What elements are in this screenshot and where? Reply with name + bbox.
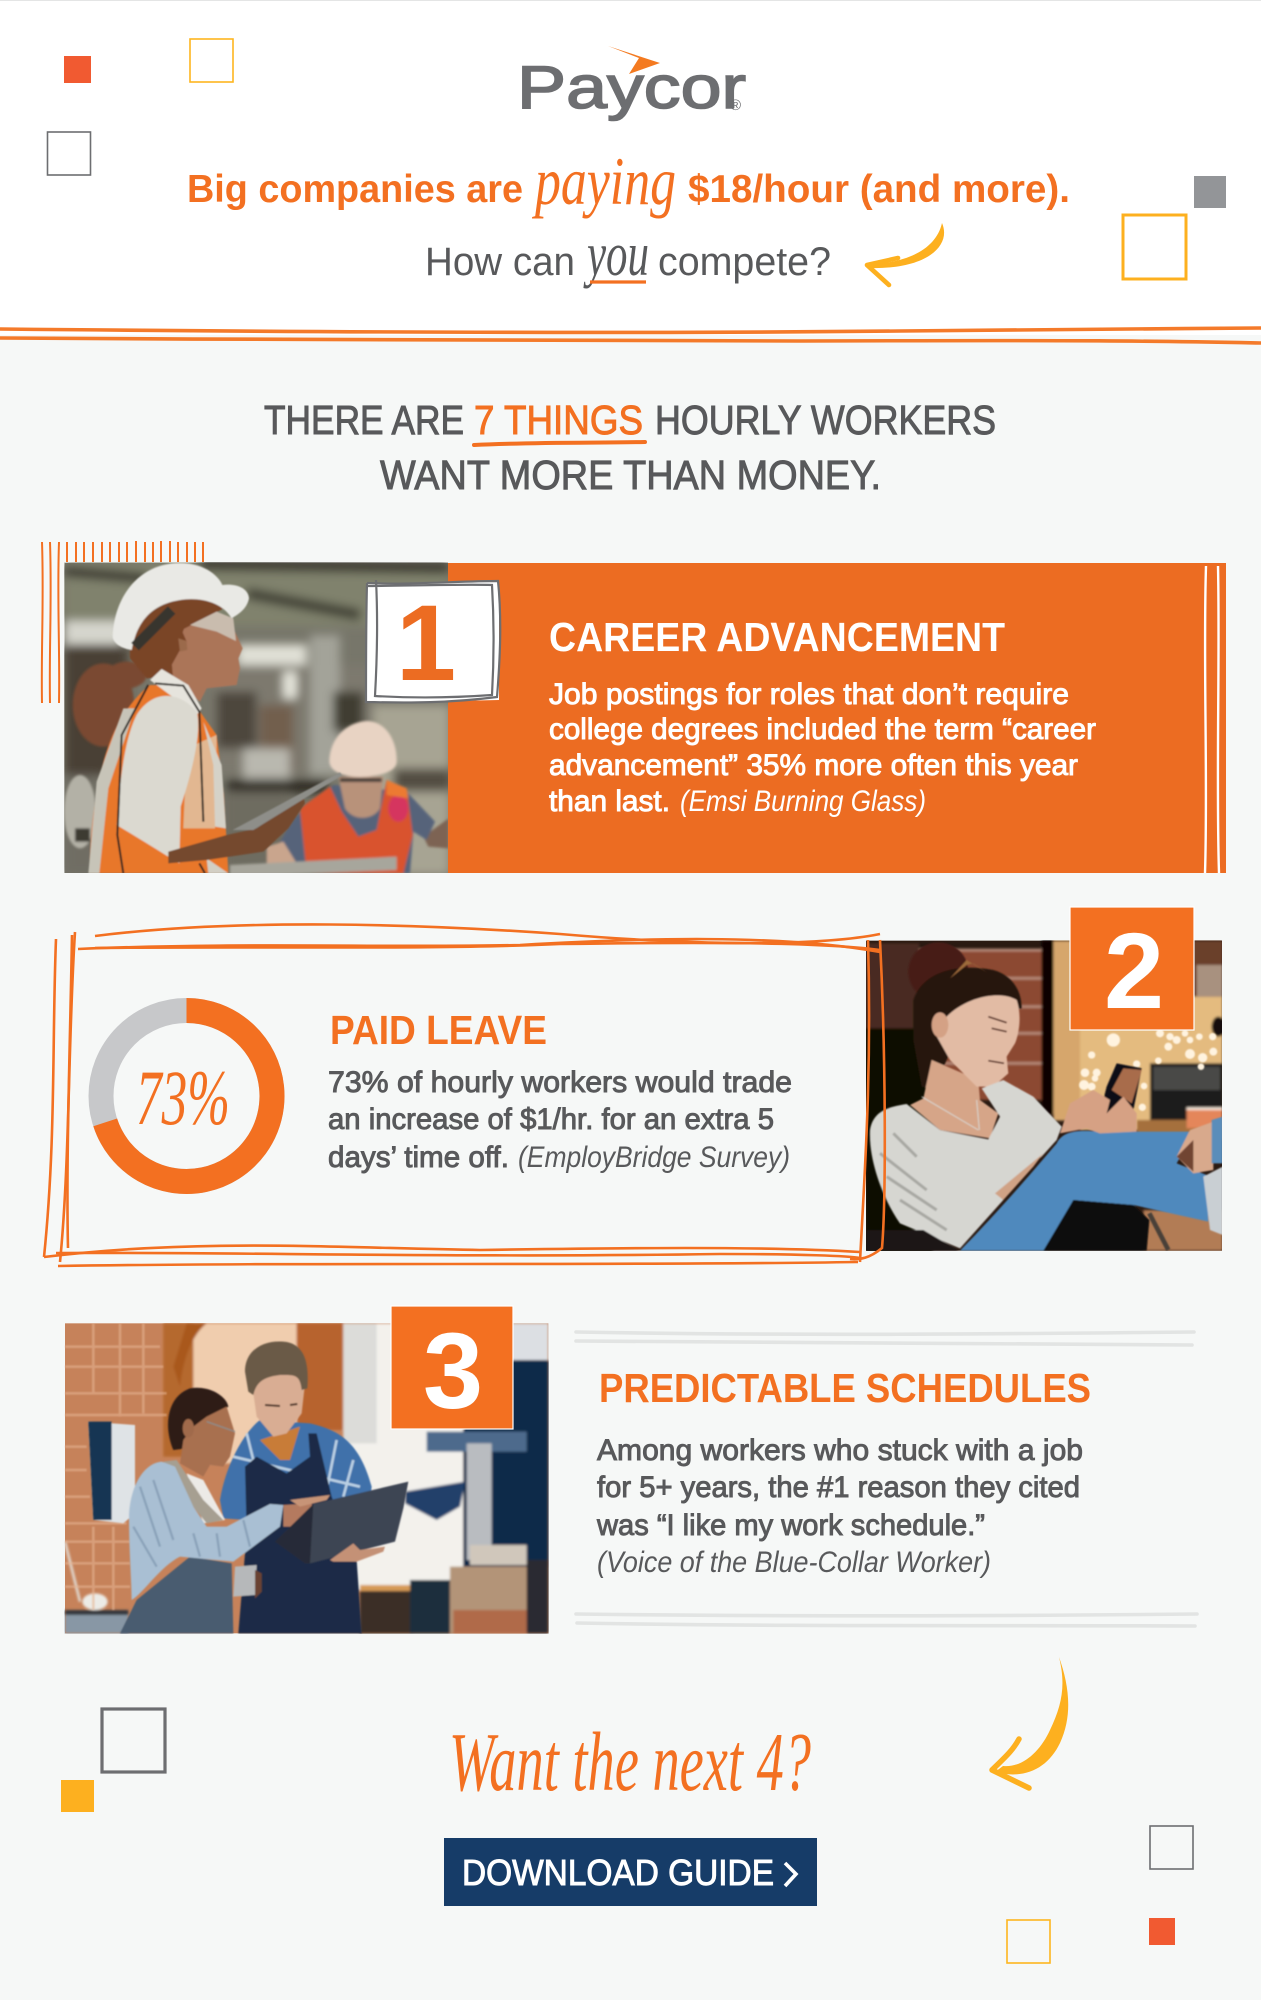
button: download guide: [444, 1838, 817, 1906]
neck and face: [910, 1060, 998, 1138]
body text: predictable schedules: [596, 1434, 1083, 1579]
white edge lines: [1205, 566, 1219, 873]
hands and phone: [1104, 1062, 1142, 1114]
badge: number 3: [391, 1306, 513, 1431]
donut chart: 73%: [101, 1010, 272, 1182]
body text: predictable schedules: was “I like my work schedule.”: [596, 1509, 985, 1542]
body text: paid leave: an increase of $1/hr. for an extra 5: [328, 1103, 774, 1136]
body text: paid leave: days’ time off.: [328, 1141, 509, 1174]
hand-drawn orange frame: [44, 924, 885, 1266]
body text: predictable schedules: for 5+ years, the #1 reason they cited: [597, 1471, 1080, 1504]
photo: woman with phone: [866, 941, 1225, 1252]
chair: [866, 1230, 958, 1251]
woman apron and cardigan: [120, 1557, 233, 1633]
body text: career advancement: college degrees included the term “career: [549, 713, 1096, 746]
panel 3: predictable schedules: [65, 1306, 1197, 1633]
section heading: HOURLY WORKERS: [655, 397, 996, 443]
body text: career advancement: than last.: [549, 785, 670, 818]
title: career advancement: CAREER ADVANCEMENT: [549, 614, 1005, 660]
subheadline: you: [583, 221, 649, 289]
header section: [0, 39, 1261, 343]
decorative squares: header right: [1123, 176, 1226, 279]
badge: number 2: 2: [1104, 910, 1164, 1031]
body text: career advancement: advancement” 35% more often this year: [549, 749, 1078, 782]
body text: paid leave: [328, 1066, 792, 1174]
headline: paying: [532, 143, 676, 219]
decorative squares: footer left: [61, 1709, 165, 1812]
body text: paid leave: (EmployBridge Survey): [518, 1141, 790, 1174]
cup: [233, 1565, 257, 1597]
headline: $18/hour (and more).: [688, 168, 1070, 211]
body text: career advancement: (Emsi Burning Glass): [680, 785, 926, 818]
headline: [187, 143, 1070, 219]
donut chart: 73%: 73%: [136, 1054, 230, 1141]
bokeh lights: [1079, 1029, 1217, 1111]
laptop: [305, 1482, 408, 1563]
section heading: WANT MORE THAN MONEY.: [380, 452, 881, 498]
title: paid leave: PAID LEAVE: [330, 1007, 547, 1053]
footer call to action: [61, 1657, 1193, 1963]
decorative squares: footer right: [1007, 1826, 1193, 1963]
orange card: [448, 563, 1226, 873]
panel 2: paid leave: [44, 907, 1225, 1266]
dispenser: [88, 1422, 135, 1523]
man: [220, 1420, 372, 1520]
hand-drawn orange divider: [0, 328, 1261, 343]
body text: career advancement: [549, 678, 1096, 818]
panel 1: career advancement: [42, 541, 1226, 875]
logo: Paycor: Paycor: [517, 54, 746, 121]
foot: [1177, 1122, 1213, 1173]
title: predictable schedules: PREDICTABLE SCHEDULES: [599, 1365, 1091, 1411]
headline: Big companies are: [187, 168, 523, 211]
body text: predictable schedules: Among workers who stuck with a job: [597, 1434, 1083, 1467]
hair: [908, 942, 969, 992]
hand-drawn orange stripes: [42, 541, 203, 703]
handwritten prompt: Want the next 4?: [449, 1716, 811, 1809]
jeans: [960, 1131, 1208, 1251]
decorative squares: header left: [48, 39, 233, 175]
badge: number 3: 3: [423, 1310, 483, 1431]
subheadline: How can: [425, 240, 575, 284]
sweater: [870, 1080, 1062, 1248]
badge: number 1: [366, 580, 500, 703]
section heading: THERE ARE: [264, 397, 464, 443]
logo: Paycor: ®: [730, 97, 741, 114]
arrow: yellow pointing left: [866, 223, 944, 285]
section heading: [264, 397, 996, 498]
woman hair and face: [168, 1388, 228, 1450]
badge: number 1: 1: [396, 582, 456, 703]
photo: workers in hard hats: [64, 563, 450, 875]
badge: number 2: [1070, 907, 1194, 1031]
body text: career advancement: Job postings for roles that don’t require: [549, 678, 1069, 711]
photo: two baristas with laptop: [65, 1323, 548, 1633]
woman: [129, 602, 184, 680]
brick texture: [65, 1323, 167, 1610]
subheadline: [425, 221, 831, 289]
arrow: yellow pointing to button: [992, 1657, 1068, 1788]
body text: paid leave: 73% of hourly workers would trade: [328, 1066, 792, 1099]
body text: predictable schedules: (Voice of the Blue-Collar Worker): [597, 1546, 991, 1579]
man: [273, 785, 435, 873]
button: download guide: DOWNLOAD GUIDE: [462, 1852, 774, 1893]
section heading: 7 THINGS: [474, 397, 643, 443]
subheadline: compete?: [658, 240, 831, 284]
